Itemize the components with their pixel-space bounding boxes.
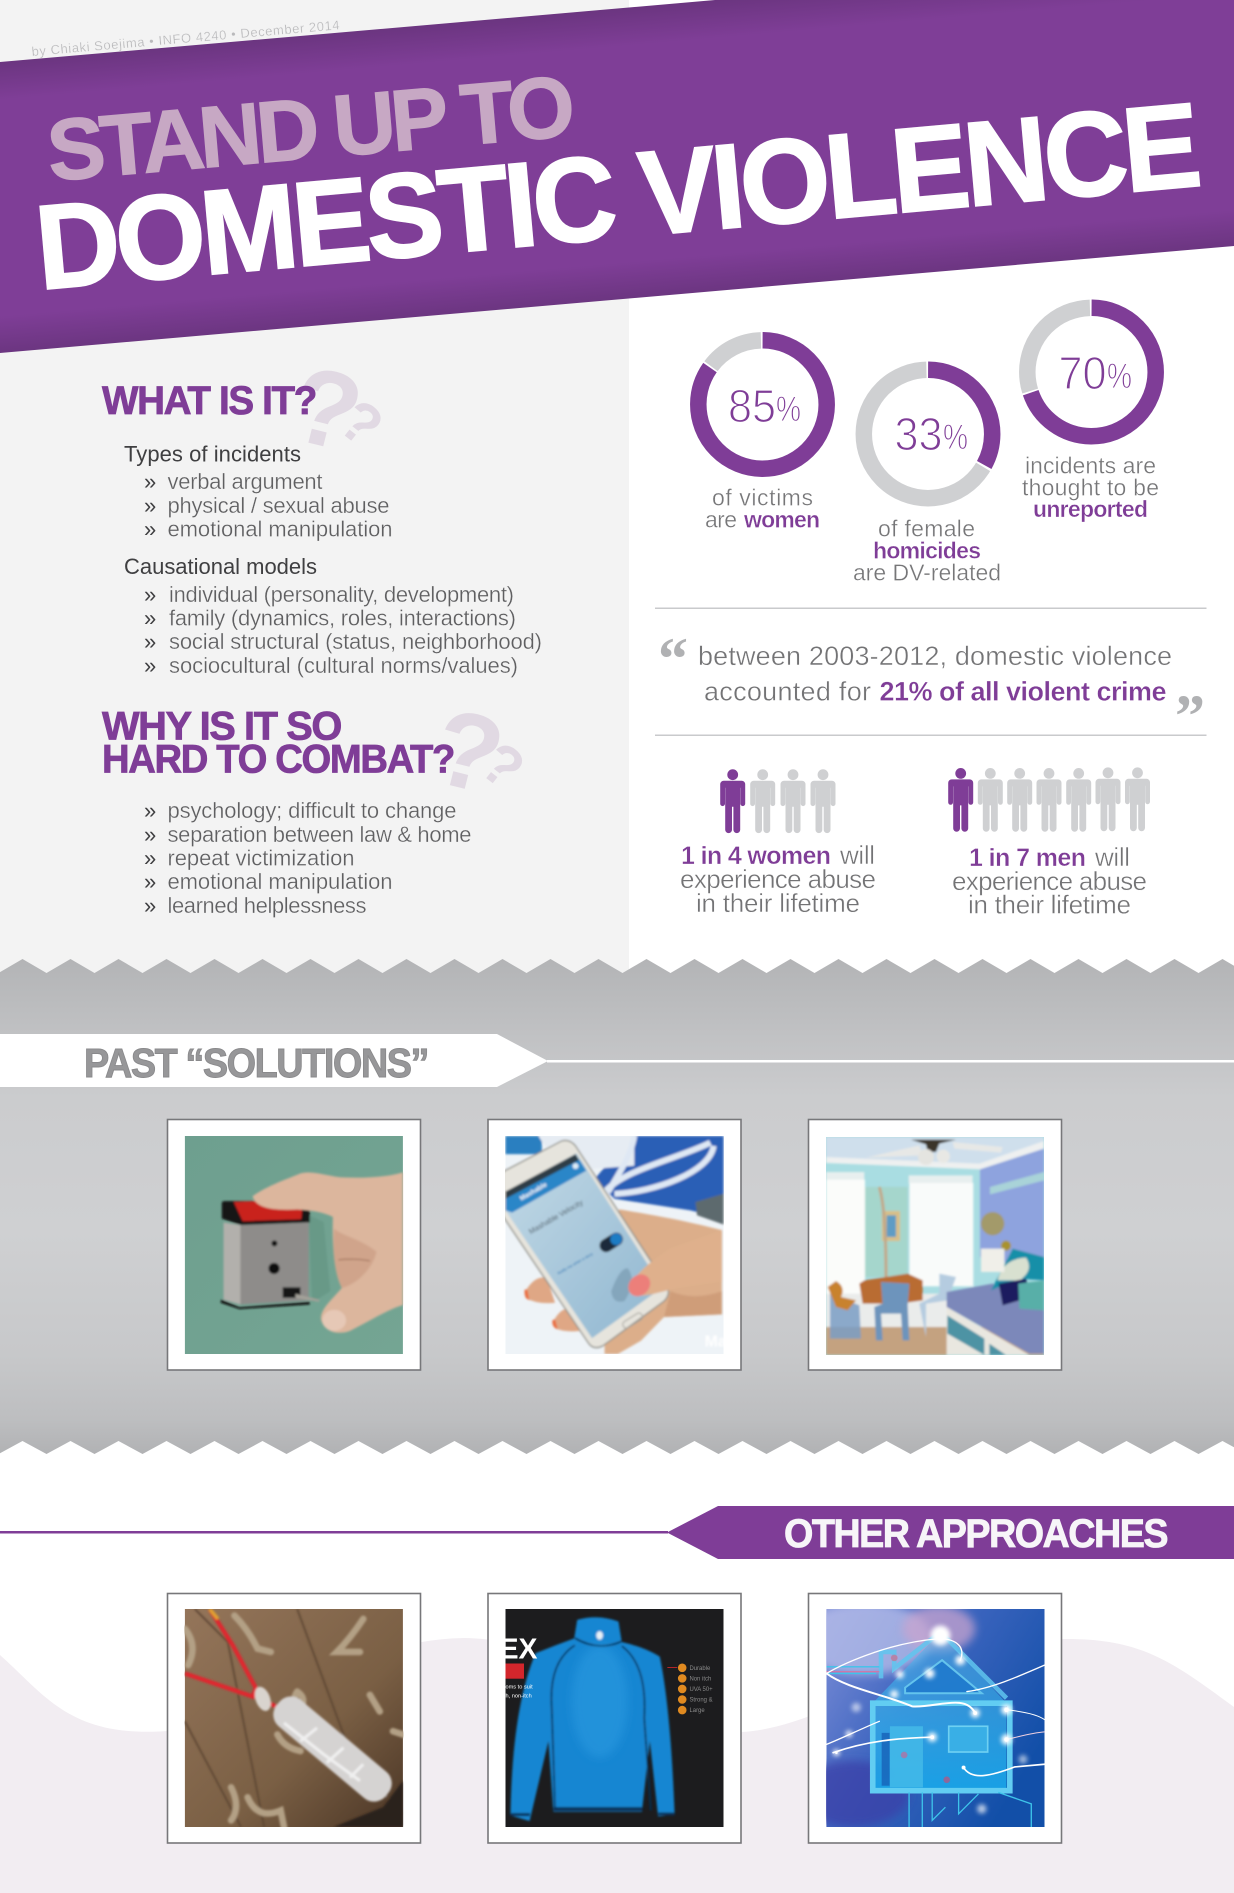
quote text: accounted for xyxy=(704,676,871,706)
list: types of incidents: » xyxy=(144,516,156,542)
icon: question marks: ? xyxy=(327,387,395,460)
subheading: causational models: Causational models xyxy=(124,554,317,579)
caption: incidents are thought to be unreported: thought to be xyxy=(1022,474,1159,500)
title: stand up to: STAND UP TO xyxy=(43,58,576,200)
panel: past solutions xyxy=(0,959,1234,1454)
quote text: 21% of all violent crime xyxy=(880,676,1166,706)
caption: incidents are thought to be unreported: incidents are xyxy=(1025,452,1156,478)
list: reasons: » xyxy=(144,893,156,918)
caption: incidents are thought to be unreported xyxy=(1022,452,1159,522)
photo: blue rash guard: Durable xyxy=(689,1666,711,1672)
caption: 1 in 7 men: experience abuse xyxy=(952,866,1147,896)
photo: hand holding smartphone: Mashable xyxy=(519,1181,549,1202)
caption: of female homicides are DV-related xyxy=(853,516,1001,586)
caption: incidents are thought to be unreported: unreported xyxy=(1033,496,1148,522)
list: types of incidents xyxy=(144,469,392,542)
caption: 1 in 4 women: will xyxy=(839,840,875,870)
caption: of female homicides are DV-related: are DV-related xyxy=(853,560,1001,586)
chart: donut 85 percent: 85 xyxy=(728,380,776,432)
photo: digital home circuit xyxy=(826,1609,1045,1827)
title band xyxy=(0,0,1234,353)
list: reasons: » xyxy=(144,798,156,823)
chart: donut 70 percent: % xyxy=(1107,357,1132,396)
chart: donut 70 percent: 70 xyxy=(1058,347,1106,399)
list: reasons: » xyxy=(144,846,156,870)
list: causational models: » xyxy=(144,582,156,607)
list: types of incidents: » xyxy=(144,493,156,518)
chart: donut 33 percent xyxy=(863,369,993,499)
chart: donut 33 percent: 33 xyxy=(894,408,942,460)
photo frame: panic button xyxy=(168,1120,420,1370)
photo: blue rash guard: h, non-itch xyxy=(506,1694,532,1700)
photo frame: safe room xyxy=(808,1120,1062,1370)
photo: blue rash guard: UVA 50+ xyxy=(689,1687,713,1693)
heading: why is it so hard to combat xyxy=(102,704,454,782)
photo frame: smart home xyxy=(797,1594,1062,1843)
list: causational models: social structural (status, neighborhood) xyxy=(169,629,542,654)
caption: of victims are women: women xyxy=(743,506,820,532)
banner: past solutions: PAST “SOLUTIONS” xyxy=(84,1040,428,1086)
photo frame: crystal pendant xyxy=(168,1594,420,1843)
list: reasons xyxy=(144,798,472,918)
byline: by Chiaki Soejima • INFO 4240 • December 2014 xyxy=(31,17,340,59)
subheading: types of incidents: Types of incidents xyxy=(124,442,301,466)
photo: hand holding smartphone xyxy=(505,1136,727,1354)
chart: donut 70 percent xyxy=(1027,307,1156,437)
photo: blue rash guard: Non itch xyxy=(689,1676,711,1682)
list: causational models: family (dynamics, roles, interactions) xyxy=(169,606,516,630)
list: causational models: » xyxy=(144,629,156,654)
icon: closing quote mark: ” xyxy=(1175,683,1205,749)
photo: blue rash guard xyxy=(500,1609,724,1827)
photo: blue rash guard: EX xyxy=(500,1634,537,1666)
caption: of female homicides are DV-related: homicides xyxy=(873,538,981,564)
caption: 1 in 4 women xyxy=(680,840,876,918)
caption: of victims are women: are xyxy=(705,506,737,532)
photo: crystal pendant on red cord xyxy=(184,1609,404,1827)
caption: of victims are women xyxy=(705,484,820,532)
list: reasons: psychology; difficult to change xyxy=(168,798,456,823)
list: types of incidents: verbal argument xyxy=(168,469,322,494)
quote text: between 2003-2012, domestic violence xyxy=(698,641,1172,671)
background wave xyxy=(0,1638,1234,1893)
heading banner: other approaches xyxy=(0,1506,1234,1559)
callout: quote xyxy=(658,626,1205,749)
list: types of incidents: emotional manipulation xyxy=(168,516,392,542)
photo: panic button pressed by hand xyxy=(184,1136,404,1354)
photo: bright blue bedroom xyxy=(826,1137,1044,1355)
caption: 1 in 7 men: in their lifetime xyxy=(968,890,1131,920)
icon: question marks: ? xyxy=(422,684,515,818)
photo: hand holding smartphone: Mashable Velocity xyxy=(527,1198,585,1236)
chart: donut 85 percent: % xyxy=(776,390,801,429)
list: types of incidents: physical / sexual abuse xyxy=(168,493,390,518)
photo: blue rash guard: Large xyxy=(689,1708,705,1714)
caption: of female homicides are DV-related: of female xyxy=(878,516,975,542)
panel: why is it so hard to combat xyxy=(102,684,536,918)
list: reasons: separation between law & home xyxy=(168,822,472,847)
list: causational models: » xyxy=(144,653,156,678)
pictogram: 1 in 4 women xyxy=(720,769,836,833)
list: causational models xyxy=(144,582,542,678)
caption: 1 in 4 women: 1 in 4 women xyxy=(681,842,831,870)
chart: donut 33 percent: % xyxy=(943,418,968,457)
banner: past solutions xyxy=(0,1034,1234,1087)
list: causational models: individual (personality, development) xyxy=(169,582,514,607)
list: causational models: sociocultural (cultural norms/values) xyxy=(169,653,518,678)
quote text xyxy=(698,641,1172,706)
icon: question marks: ? xyxy=(280,342,374,475)
caption: 1 in 7 men: will xyxy=(1094,842,1130,872)
list: reasons: emotional manipulation xyxy=(168,869,392,894)
heading: what is it: WHAT IS IT? xyxy=(102,379,316,423)
panel: what is it xyxy=(102,342,542,678)
photo frame: protective shirt xyxy=(488,1594,741,1843)
photo frame: smartphone app xyxy=(488,1120,741,1370)
icon: opening quote mark: “ xyxy=(658,626,688,692)
heading: why is it so hard to combat: WHY IS IT SO xyxy=(102,704,341,748)
caption: of victims are women: of victims xyxy=(712,484,813,510)
photo: blue rash guard: oms to suit xyxy=(506,1684,533,1690)
icon: question marks: ? xyxy=(468,730,536,803)
photo: hand holding smartphone: Ma xyxy=(705,1334,727,1351)
list: reasons: repeat victimization xyxy=(168,846,354,870)
list: types of incidents: » xyxy=(144,469,156,494)
caption: 1 in 4 women: in their lifetime xyxy=(696,888,860,918)
list: reasons: » xyxy=(144,822,156,847)
heading: why is it so hard to combat: HARD TO COMBAT? xyxy=(102,738,454,782)
photo: hand holding smartphone: Notify me when a story xyxy=(556,1251,594,1276)
caption: 1 in 7 men: 1 in 7 men xyxy=(969,844,1086,872)
panel: left column background xyxy=(0,0,629,980)
pictogram: 1 in 7 men xyxy=(948,767,1150,832)
list: causational models: » xyxy=(144,606,156,630)
title: domestic violence: DOMESTIC VIOLENCE xyxy=(30,78,1202,315)
list: reasons: learned helplessness xyxy=(168,893,366,918)
caption: 1 in 4 women: experience abuse xyxy=(680,864,876,894)
chart: donut 85 percent xyxy=(698,340,827,469)
heading banner: other approaches: OTHER APPROACHES xyxy=(784,1512,1168,1556)
photo: blue rash guard: Strong & xyxy=(689,1697,713,1703)
list: reasons: » xyxy=(144,869,156,894)
caption: 1 in 7 men xyxy=(952,842,1147,920)
